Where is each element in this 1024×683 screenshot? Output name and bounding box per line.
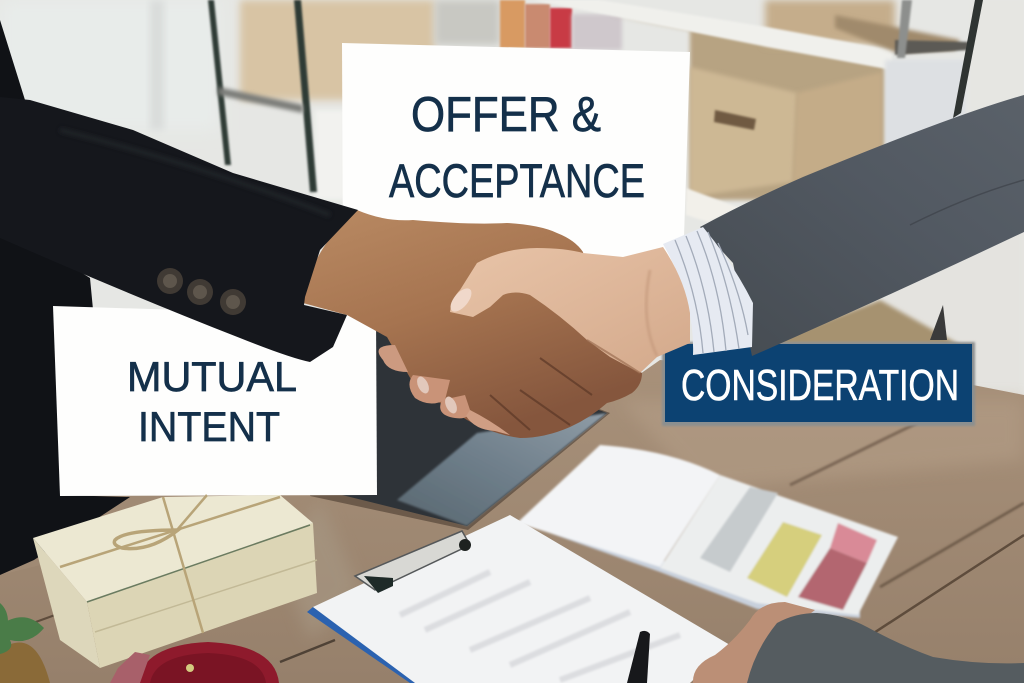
gift box xyxy=(33,495,317,668)
heading: acceptance: ACCEPTANCE xyxy=(389,154,645,207)
heading: mutual: MUTUAL xyxy=(127,353,297,400)
shirt cuff xyxy=(663,227,753,355)
icon: sleeve button 2 xyxy=(187,279,213,305)
left sleeve xyxy=(0,97,358,362)
icon: sleeve button 1 xyxy=(157,268,183,294)
light hand xyxy=(447,247,690,373)
plant xyxy=(0,603,50,683)
wooden table xyxy=(0,360,1024,683)
dark hand and wrist xyxy=(303,210,642,438)
office background xyxy=(0,0,1024,420)
red cup xyxy=(110,642,279,683)
heading: intent: INTENT xyxy=(138,403,280,450)
open booklet xyxy=(517,445,898,618)
icon: pen xyxy=(627,631,650,683)
card: mutual intent xyxy=(53,306,377,496)
clipboard and documents xyxy=(307,515,730,683)
laptop xyxy=(310,325,610,530)
heading: offer and: OFFER & xyxy=(411,88,601,142)
icon: clipboard clip xyxy=(355,531,471,593)
left figure torso xyxy=(0,20,130,575)
card: consideration xyxy=(662,342,975,426)
icon: sleeve button 3 xyxy=(220,289,246,315)
foreground hand and sleeve xyxy=(693,602,1024,683)
card: offer and acceptance xyxy=(342,43,690,268)
right sleeve xyxy=(700,95,1024,356)
